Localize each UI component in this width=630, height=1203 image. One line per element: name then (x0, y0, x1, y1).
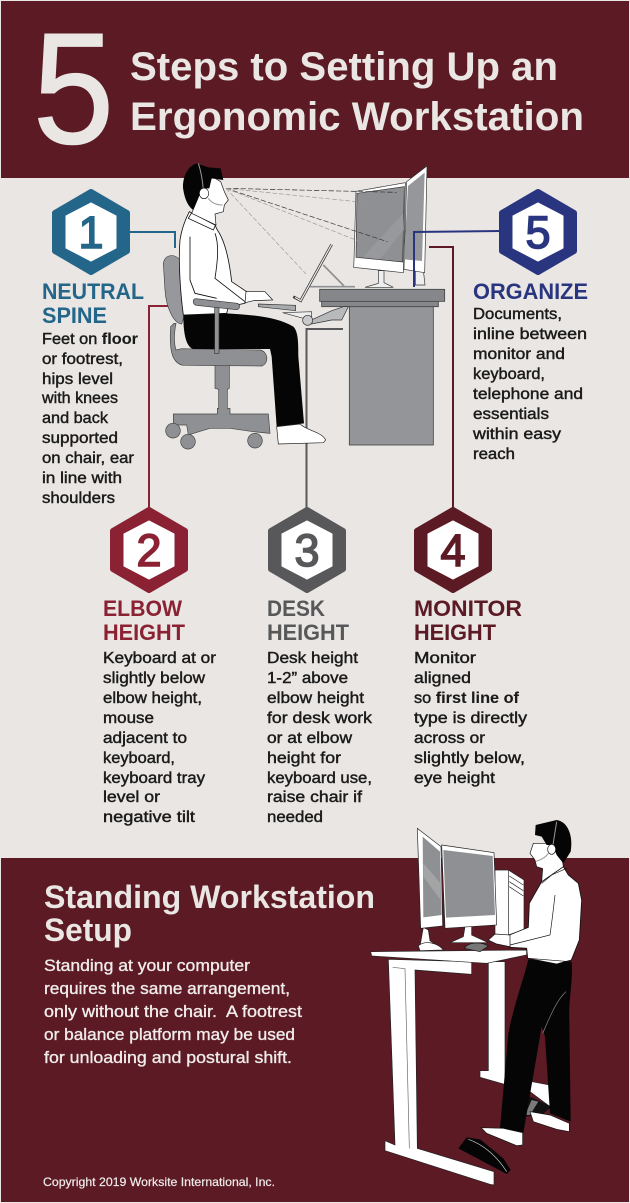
trousers (500, 959, 572, 1133)
body text: elbow height (267, 690, 365, 707)
body text: raise chair if (267, 789, 363, 806)
heading: SPINE (42, 303, 107, 328)
computer tower (495, 870, 524, 935)
standing section heading: Setup (44, 912, 132, 948)
body text: in line with (42, 470, 122, 487)
body text: Monitor (414, 650, 476, 667)
step 4: monitor height (414, 510, 527, 787)
dual monitors (417, 828, 497, 952)
body text: level or (103, 789, 160, 806)
copyright: Copyright 2019 Worksite International, Inc. (43, 1175, 275, 1189)
badge 1 (55, 192, 127, 272)
body text: negative tilt (103, 809, 196, 826)
desk (320, 289, 445, 445)
standing person (481, 820, 582, 1146)
body text: within easy (472, 426, 561, 443)
body text: essentials (473, 406, 549, 423)
heading: ELBOW (103, 596, 182, 621)
badge 5: 5 (525, 207, 551, 258)
standing section body text (44, 956, 302, 1067)
armrest (193, 299, 240, 353)
headset (536, 822, 557, 861)
standing section body text: requires the same arrangement, (44, 979, 290, 998)
body text: Feet on floor (42, 331, 138, 348)
chair (163, 256, 270, 449)
body text: Documents, (473, 306, 562, 323)
body text: inline between (473, 326, 587, 343)
standing section body text: or balance platform may be used (44, 1025, 295, 1044)
dual monitors (354, 166, 427, 287)
body text: height for (267, 750, 341, 767)
face (530, 843, 563, 882)
body text: keyboard use, (267, 770, 372, 787)
body text: with knees (41, 390, 118, 407)
body text (267, 650, 372, 826)
badge 3 (271, 510, 343, 590)
standing section heading (44, 879, 375, 948)
body text: hips level (42, 371, 113, 388)
hand (488, 934, 510, 947)
standing section band (1, 858, 629, 1202)
heading: HEIGHT (414, 620, 497, 645)
body text: Desk height (267, 650, 359, 667)
headset (198, 163, 223, 205)
shirt (179, 212, 247, 315)
hair (535, 820, 571, 863)
body text: aligned (414, 670, 471, 687)
body text: reach (473, 446, 515, 463)
body text: type is directly (414, 710, 527, 727)
body text: slightly below (103, 670, 206, 687)
shoe (277, 424, 326, 444)
standing section heading: Standing Workstation (44, 879, 375, 915)
body text: needed (267, 809, 323, 826)
body text: and back (42, 410, 108, 427)
body text: 1-2” above (267, 670, 348, 687)
hand (245, 292, 273, 303)
heading: MONITOR (414, 596, 522, 621)
body text: keyboard, (103, 750, 175, 767)
body text (414, 650, 527, 787)
body text: mouse (103, 710, 154, 727)
heading: DESK (267, 596, 325, 621)
step 1: neutral spine (41, 192, 144, 507)
body text: shoulders (42, 490, 115, 507)
standing section body text: for unloading and postural shift. (44, 1048, 292, 1067)
standing desk frame (371, 950, 550, 1185)
body text (472, 306, 587, 463)
face (192, 177, 228, 225)
body text: supported (42, 430, 118, 447)
step 3: desk height (267, 510, 372, 826)
connector lines (130, 232, 453, 510)
body text: keyboard, (473, 366, 545, 383)
heading: HEIGHT (103, 620, 186, 645)
illustration: seated worker at desk (163, 163, 445, 449)
body text: for desk work (267, 710, 372, 727)
standing section body text: only without the chair. A footrest (44, 1002, 302, 1021)
worker (179, 163, 326, 444)
standing section body text: Standing at your computer (44, 956, 250, 975)
badge 4: 4 (440, 525, 466, 576)
keyboard tray (258, 304, 348, 325)
body text: so first line of (414, 690, 520, 707)
body text: Keyboard at or (103, 650, 216, 667)
body text: elbow height, (103, 690, 202, 707)
step 2: elbow height (103, 510, 216, 826)
shirt (509, 867, 582, 964)
badge 2: 2 (136, 525, 162, 576)
body text: adjacent to (103, 730, 187, 747)
illustration: standing worker at desk (371, 820, 582, 1185)
heading (414, 596, 522, 645)
body text (103, 650, 216, 826)
body text (41, 331, 138, 507)
body text: keyboard tray (103, 770, 205, 787)
title: Ergonomic Workstation (130, 95, 584, 139)
hair (183, 163, 223, 210)
blue connector for step 5 (414, 231, 500, 287)
body text: across or (414, 730, 485, 747)
heading: HEIGHT (267, 620, 350, 645)
body text: on chair, ear (42, 450, 134, 467)
heading: ORGANIZE (473, 279, 588, 304)
shoes (481, 1128, 523, 1146)
body text: telephone and (473, 386, 583, 403)
heading (267, 596, 350, 645)
title: Steps to Setting Up an (130, 45, 558, 89)
body text: or footrest, (42, 351, 123, 368)
maroon stub over monitor (429, 246, 453, 248)
document holder (293, 244, 355, 301)
body text: monitor and (473, 346, 565, 363)
badge 4 (417, 510, 489, 590)
step 5: organize (472, 192, 588, 463)
body text: or at elbow (267, 730, 353, 747)
badge 5 (502, 192, 574, 272)
body text: slightly below, (414, 750, 525, 767)
badge 2 (113, 510, 185, 590)
trousers (183, 313, 304, 427)
heading (103, 596, 186, 645)
header band (1, 1, 629, 178)
badge 3: 3 (294, 525, 320, 576)
big numeral 5: 5 (33, 1, 114, 177)
body text: eye height (414, 770, 496, 787)
heading (42, 279, 144, 328)
badge 1: 1 (78, 207, 104, 258)
title (130, 45, 584, 139)
lines of sight (226, 188, 397, 274)
footrest (458, 1097, 552, 1174)
heading: NEUTRAL (42, 279, 144, 304)
